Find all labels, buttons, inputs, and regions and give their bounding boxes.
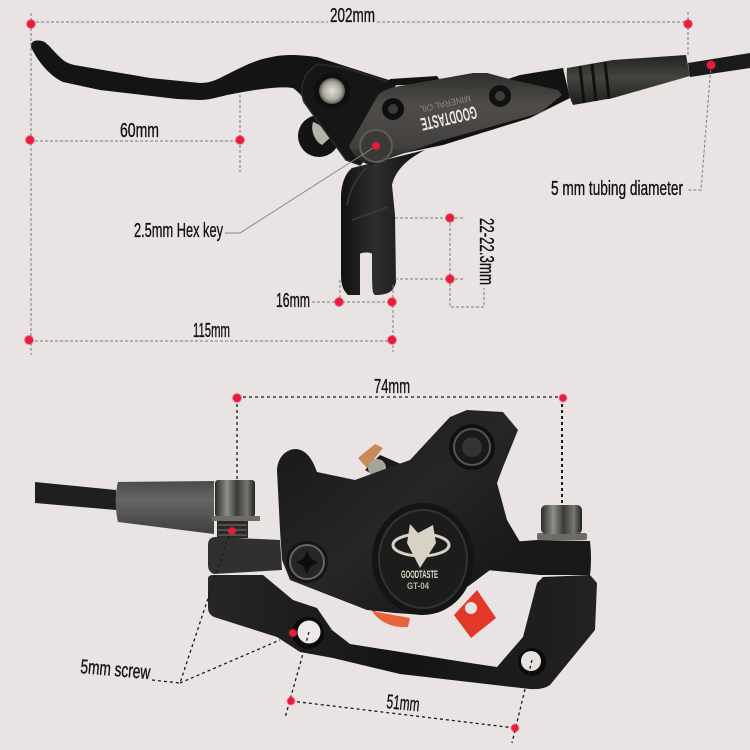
logo: GT-04 bbox=[407, 581, 429, 591]
head bolts bbox=[382, 85, 511, 120]
pivot bolt bbox=[314, 73, 350, 109]
label: 16mm: 16mm bbox=[276, 290, 310, 312]
brake caliper assembly bbox=[35, 410, 597, 689]
label: 202mm: 202mm bbox=[330, 5, 375, 27]
copper pin bbox=[358, 444, 383, 468]
label: 74mm: 74mm bbox=[374, 376, 410, 398]
master cylinder head bbox=[349, 73, 562, 165]
banjo fitting bbox=[212, 480, 260, 538]
leader line: hex key bbox=[225, 146, 376, 233]
clamp highlight bbox=[347, 168, 388, 220]
dimension labels bbox=[80, 5, 683, 716]
lever blade bbox=[31, 40, 395, 130]
right mount block bbox=[486, 540, 591, 575]
logo: GOODTASTE bbox=[401, 569, 438, 581]
disc cap bbox=[372, 503, 474, 615]
right mount post bbox=[537, 505, 587, 540]
rear pivot bolt bbox=[312, 122, 331, 145]
hose connector bbox=[567, 55, 690, 105]
label: 115mm: 115mm bbox=[193, 320, 230, 342]
bracket right hole bbox=[518, 648, 546, 676]
hydraulic hose (lever side) bbox=[688, 53, 750, 77]
rear pivot lobe bbox=[298, 115, 340, 157]
label: 5 mm tubing diameter: 5 mm tubing diameter bbox=[551, 178, 683, 200]
red pad spacer bbox=[454, 590, 496, 638]
brand text on head bbox=[419, 93, 479, 134]
small silver bolt bbox=[365, 455, 403, 482]
lower left bolt bbox=[286, 541, 328, 583]
label: 5mm screw: 5mm screw bbox=[80, 656, 152, 684]
bracket bbox=[208, 575, 597, 689]
label: 51mm: 51mm bbox=[385, 691, 421, 716]
brand text on head: MINERAL OIL bbox=[419, 93, 472, 114]
body black rear sections bbox=[384, 68, 570, 155]
pivot plate bbox=[302, 64, 395, 165]
caliper hose bbox=[35, 482, 116, 510]
brand text on head: GOODTASTE bbox=[419, 102, 479, 134]
label: 22-22.3mm: 22-22.3mm bbox=[475, 218, 497, 285]
bracket left hole bbox=[292, 617, 324, 649]
label: 60mm: 60mm bbox=[120, 120, 159, 142]
left mount block bbox=[208, 537, 282, 574]
dimension lines: lever bbox=[30, 12, 711, 355]
caliper body bbox=[277, 410, 520, 615]
hose sleeve bbox=[116, 481, 214, 534]
logo bbox=[393, 524, 449, 591]
top right bolt bbox=[449, 424, 495, 470]
orange pad bbox=[370, 608, 410, 627]
spacer hole bbox=[465, 602, 477, 614]
hex bolt bbox=[360, 130, 392, 162]
brake lever assembly bbox=[31, 40, 750, 295]
dimension lines: caliper bbox=[152, 397, 563, 743]
handlebar clamp bbox=[341, 150, 425, 295]
label: 2.5mm Hex key: 2.5mm Hex key bbox=[134, 220, 223, 242]
